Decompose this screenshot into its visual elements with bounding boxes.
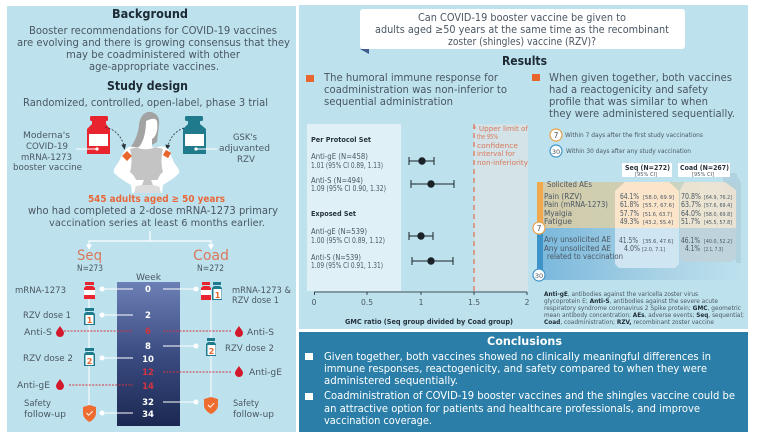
labels: Seq arm timeline: Safety (24, 398, 52, 409)
callout: research question: adults aged ≥50 years at the same time as the recombinant (375, 24, 669, 36)
labels: Seq arm timeline: Anti-gE (17, 380, 50, 391)
forest labels: per protocol set: 1.09 (95% CI 0.90, 1.32) (311, 184, 386, 193)
label: GSK vaccine: GSK's (233, 132, 257, 143)
values: Seq: 4.0% (624, 244, 640, 253)
callout: participants: 545 adults aged ≥ 50 years (88, 194, 225, 205)
text block: background: are evolving and there is growing consensus that they (17, 37, 290, 49)
labels: Coad arm timeline: Safety (233, 398, 259, 409)
annotation: upper limit: interval for (477, 150, 515, 158)
labels: Seq arm timeline: RZV dose 2 (23, 353, 73, 364)
labels: Coad arm timeline: Anti-S (247, 327, 274, 338)
x axis: 0.5 (361, 298, 373, 307)
footnote: abbreviations: glycoprotein E; Anti-S, antibodies against the severe acute (544, 298, 718, 305)
icon: 30-day marker: 30 (535, 272, 543, 280)
values: Coad: [58.0, 69.8] (704, 212, 732, 218)
text block: background: Booster recommendations for COVID-19 vaccines (29, 25, 277, 37)
icon: Coad RZV dose 1 vial: 1 (215, 291, 221, 300)
icon: Coad RZV dose 2 vial (206, 338, 216, 356)
values: Coad: 63.7% (681, 200, 701, 209)
values: Coad: 51.7% (681, 217, 700, 226)
column header: Seq: [95% CI] (635, 172, 657, 178)
icon: Seq RZV dose 2 vial: 2 (87, 357, 92, 366)
heading: study design: Study design (107, 79, 188, 93)
forest labels: exposed set: 1.00 (95% CI 0.89, 1.12) (311, 236, 385, 245)
bullet: immune response: coadministration was non-inferior to (324, 84, 507, 96)
values: Seq: 61.8% (620, 200, 639, 209)
footnote: abbreviations (544, 291, 744, 326)
values: Coad: [45.5, 57.8] (704, 220, 732, 226)
conclusion bullet 2: vaccination coverage. (324, 415, 432, 427)
forest plot (307, 124, 530, 326)
legend: time windows: Within 30 days after any study vaccination (566, 148, 691, 155)
values: Coad (681, 192, 732, 253)
labels: Coad arm timeline: RZV dose 1 (232, 295, 279, 306)
icon: Coad mRNA vial (201, 282, 211, 300)
text block: background: age-appropriate vaccines. (89, 61, 219, 73)
text block: participant description (28, 205, 278, 229)
labels: Coad arm timeline: follow-up (233, 409, 274, 420)
bullet: safety profile (532, 72, 735, 120)
icon: red vaccine vial (76, 116, 110, 154)
heading: Seq arm: N=273 (77, 263, 103, 274)
text block: background: may be coadministered with other (66, 49, 241, 61)
icon: Seq RZV dose 1 vial (84, 308, 95, 325)
annotation: upper limit: confidence (477, 142, 518, 150)
panel: results (299, 5, 748, 329)
forest labels: exposed set (311, 209, 385, 270)
row labels: related to vaccination (547, 252, 623, 261)
timeline column: 12 (142, 368, 154, 378)
values: Seq: [55.7, 67.6] (643, 203, 674, 209)
bullet: immune response: sequential administration (324, 96, 453, 108)
values: Coad: 64.0% (681, 209, 701, 218)
values: Coad: 70.8% (681, 192, 701, 201)
bullet: safety profile: had a reactogenicity and safety (549, 84, 708, 96)
footnote: abbreviations: respiratory syndrome coronavirus 2 Spike protein; GMC, geometric (544, 305, 741, 312)
text: trial type: Randomized, controlled, open-label, phase 3 trial (23, 97, 268, 109)
text block: background (17, 25, 290, 73)
icon: 30-day marker (533, 269, 545, 281)
icon: vaccinated woman (114, 112, 179, 193)
annotation: upper limit (473, 125, 529, 167)
label: week axis title: Week (136, 272, 162, 283)
arrow: red vial to arm (105, 127, 126, 149)
bullet: safety profile: When given together, both vaccines (549, 72, 732, 84)
forest labels: exposed set: Anti-S (N=539) (311, 253, 361, 262)
values: Seq: 41.5% (619, 236, 638, 245)
icon: Seq safety shield (83, 405, 96, 422)
icon: Seq RZV dose 1 vial: 1 (87, 316, 93, 325)
values: Coad: [40.0, 52.2] (704, 239, 732, 245)
column header: Coad: [95% CI] (692, 172, 714, 178)
values: Seq: 57.7% (620, 209, 639, 218)
labels: Seq arm timeline: RZV dose 1 (23, 310, 71, 321)
bullet: safety profile: they were administered sequentially. (549, 108, 735, 120)
row labels (544, 180, 623, 261)
forest markers (409, 157, 454, 265)
label: Moderna vaccine: mRNA-1273 (21, 152, 72, 163)
timeline column: 14 (142, 382, 154, 392)
values: Seq: [51.6, 63.7] (643, 212, 672, 218)
row labels: Any unsolicited AE (544, 235, 611, 244)
labels: Seq arm timeline: Anti-S (24, 327, 52, 338)
row labels: Myalgia (544, 209, 572, 218)
row labels: Solicited AEs (547, 180, 592, 189)
callout: research question: Can COVID-19 booster vaccine be given to (418, 12, 626, 24)
heading: Seq arm: Seq (77, 248, 102, 264)
timeline column: 2 (145, 311, 151, 321)
conclusion bullet 1: immune responses, reactogenicity, and safety compared to when they were (324, 363, 707, 375)
bullet: immune response: The humoral immune response for (323, 72, 499, 84)
forest labels: per protocol set: Per Protocol Set (311, 135, 372, 144)
values: Coad: 46.1% (681, 236, 700, 245)
values: Seq: 49.3% (620, 217, 639, 226)
labels: Coad arm timeline: RZV dose 2 (225, 343, 274, 354)
values: Coad: [64.9, 76.2] (704, 195, 732, 201)
icon: Coad RZV dose 1 vial (212, 282, 222, 300)
x axis (312, 292, 530, 326)
column header: Coad: Coad (N=267) (680, 164, 729, 172)
bullet: immune response (306, 72, 507, 108)
heading: results: Results (502, 54, 547, 68)
label: Moderna vaccine: booster vaccine (13, 162, 82, 173)
annotation: upper limit: the 95% (477, 133, 498, 141)
icon: blood drops (56, 326, 243, 390)
legend: time windows (550, 129, 703, 157)
x axis: GMC ratio (Seq group divided by Coad group) (345, 317, 513, 326)
x axis: 2 (525, 298, 530, 307)
timeline column: 8 (145, 342, 151, 352)
label: Moderna vaccine: Moderna's (23, 130, 70, 141)
annotation: upper limit: non-inferiority (477, 159, 528, 167)
row labels: Pain (mRNA-1273) (544, 200, 608, 209)
labels: Coad arm timeline: mRNA-1273 & (232, 285, 291, 296)
heading: Coad arm (193, 248, 229, 274)
label: GSK vaccine (219, 132, 270, 165)
forest labels: exposed set: Anti-gE (N=539) (311, 227, 367, 236)
forest labels: exposed set: Exposed Set (311, 209, 357, 218)
column header: Seq: Seq (N=272) (625, 164, 670, 172)
text block: participant description: vaccination series at least 6 months earlier. (49, 218, 265, 229)
conclusion bullet 1 (305, 351, 711, 387)
row labels: Any unsolicited AE (544, 244, 611, 253)
values: Coad: 4.1% (685, 244, 700, 253)
conclusion bullet 1: administered sequentially. (324, 375, 458, 387)
legend: time windows: 7 (554, 131, 559, 140)
heading: conclusions: Conclusions (487, 334, 562, 348)
label: GSK vaccine: adjuvanted (219, 143, 270, 154)
panel: background and study design (7, 6, 296, 432)
labels: Seq arm timeline: follow-up (24, 409, 66, 420)
values: Seq: [2.0, 7.1] (642, 247, 665, 253)
values: Coad: [2.1, 7.3] (704, 247, 723, 253)
forest labels: per protocol set: Anti-gE (N=458) (311, 152, 368, 161)
labels: Coad arm timeline: Anti-gE (249, 367, 282, 378)
connector lines: blood draws (64, 331, 231, 385)
legend: time windows: Within 7 days after the first study vaccinations (565, 132, 703, 139)
label: Moderna vaccine (13, 130, 82, 173)
heading: Seq arm (77, 248, 103, 274)
timeline column: 32 (142, 398, 154, 408)
icon: Seq mRNA vial (84, 282, 95, 299)
table: adverse events (533, 163, 743, 281)
timeline column: 34 (142, 410, 154, 420)
values: Seq (619, 192, 674, 253)
values: Seq: [58.0, 69.9] (643, 195, 674, 201)
callout: research question: zoster (shingles) vaccine (RZV)? (448, 36, 596, 48)
panel: conclusions (299, 332, 748, 432)
conclusion bullet 2: an attractive option for patients and healthcare professionals, and improve (324, 403, 700, 415)
values: Coad: [57.6, 69.4] (704, 203, 732, 209)
footnote: abbreviations: Coad, coadministration; RZV, recombinant zoster vaccine (544, 319, 714, 326)
arrow: randomization bracket (87, 231, 213, 248)
row labels: Fatigue (544, 217, 572, 226)
connector lines: vaccination timepoints (100, 286, 198, 416)
column header: Seq (622, 163, 672, 178)
forest labels: per protocol set (311, 135, 386, 193)
bullet: safety profile: profile that was similar to when (549, 96, 708, 108)
timeline column (117, 282, 180, 426)
forest labels: per protocol set: Anti-S (N=494) (311, 176, 363, 185)
footnote: abbreviations: mean antibody concentration; AEs, adverse events; Seq, sequential; (544, 312, 744, 319)
callout: research question (360, 9, 685, 54)
values: Seq: [43.2, 55.4] (643, 220, 673, 226)
legend: time windows: 30 (552, 148, 560, 156)
column header: Coad (678, 163, 730, 178)
heading: Coad arm: N=272 (197, 263, 224, 274)
values: Seq: [35.6, 47.6] (643, 239, 673, 245)
values: Seq: 64.1% (620, 192, 639, 201)
heading: Coad arm: Coad (193, 248, 229, 264)
icon: Coad safety shield (204, 397, 218, 414)
footnote: abbreviations: Anti-gE, antibodies against the varicella zoster virus (544, 291, 698, 298)
arrow: teal vial to arm (166, 128, 184, 150)
x axis: 1 (419, 298, 424, 307)
annotation: upper limit: * Upper limit of (473, 125, 529, 133)
label: Moderna vaccine: COVID-19 (26, 141, 68, 152)
labels: Coad arm timeline (225, 285, 291, 420)
icon: Seq RZV dose 2 vial (84, 348, 95, 366)
text block: participant description: who had completed a 2-dose mRNA-1273 primary (28, 205, 278, 217)
icon: Coad RZV dose 2 vial: 2 (209, 347, 214, 356)
heading: background: Background (112, 7, 188, 21)
icon: 7-day marker: 7 (537, 224, 542, 233)
icon: teal vaccine vial (183, 116, 217, 154)
timeline column: 0 (145, 285, 151, 295)
row labels: Pain (RZV) (544, 192, 582, 201)
forest labels: exposed set: 1.09 (95% CI 0.91, 1.31) (311, 261, 383, 270)
label: GSK vaccine: RZV (237, 154, 256, 165)
x axis: 1.5 (468, 298, 480, 307)
timeline column: 10 (142, 355, 154, 365)
labels: Seq arm timeline: mRNA-1273 (15, 285, 66, 296)
conclusion bullet 2 (305, 390, 735, 427)
x axis: 0 (312, 298, 317, 307)
conclusion bullet 1: Given together, both vaccines showed no clinically meaningful differences in (324, 351, 711, 363)
conclusion bullet 2: Coadministration of COVID-19 booster vaccines and the shingles vaccine could be (324, 390, 735, 402)
forest labels: per protocol set: 1.01 (95% CI 0.89, 1.13) (311, 161, 383, 170)
icon: 7-day marker (533, 222, 545, 234)
labels: Seq arm timeline (15, 285, 73, 420)
timeline column: 6 (145, 327, 151, 337)
